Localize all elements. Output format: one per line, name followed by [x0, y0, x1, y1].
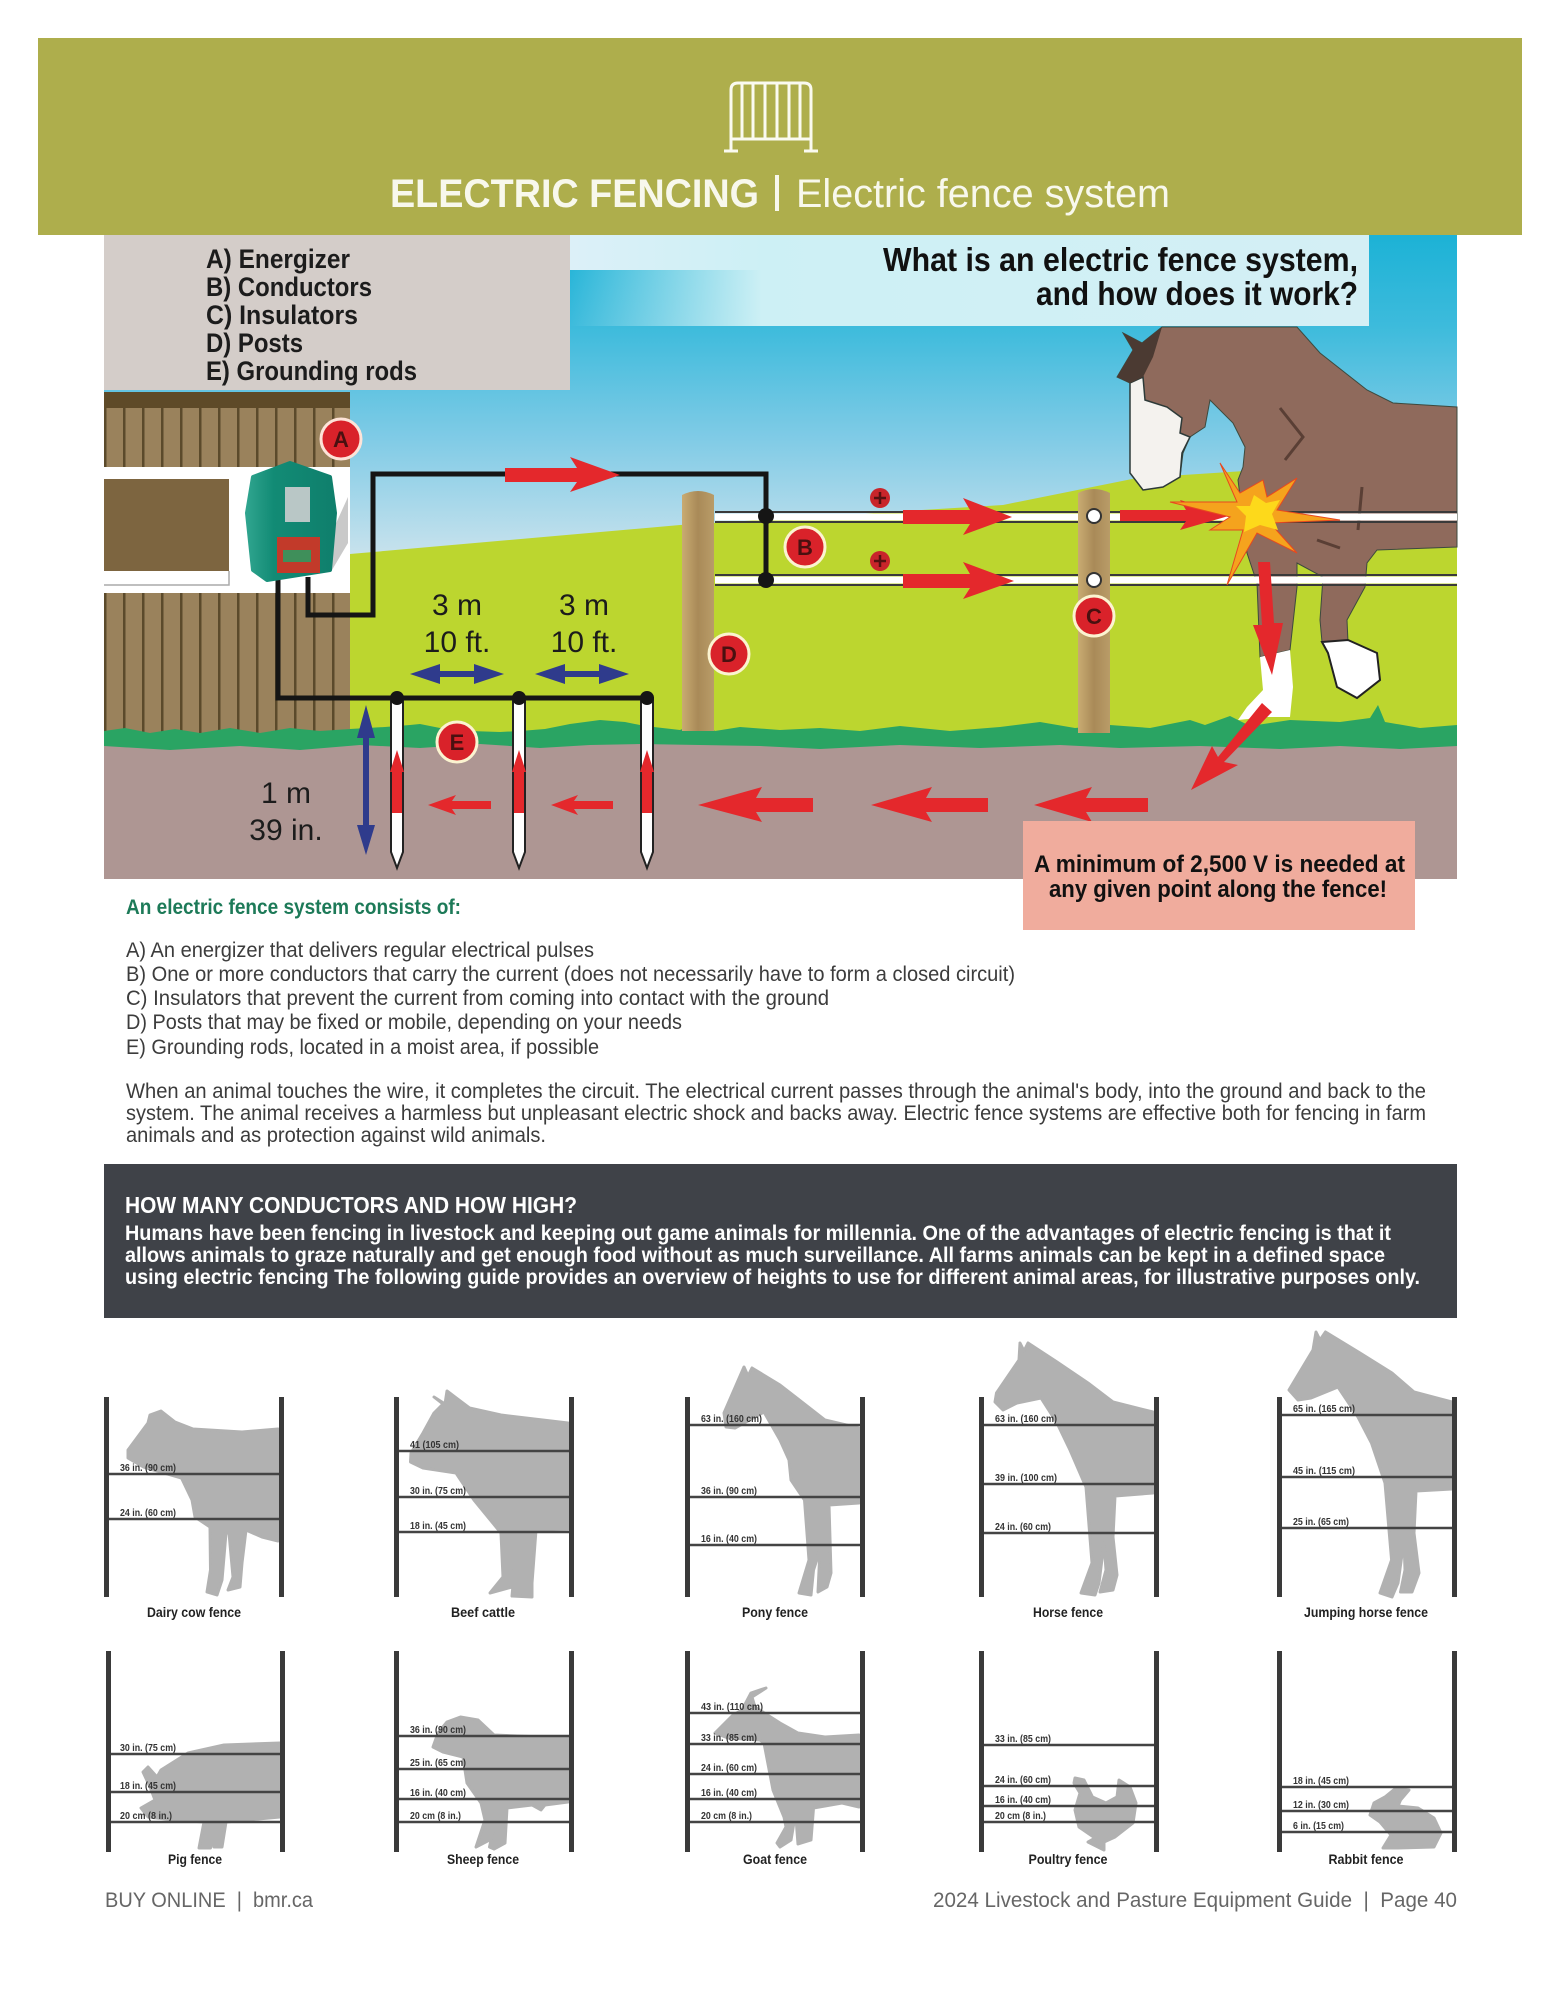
- fence guide: goat: 16 in. (40 cm): [701, 1787, 757, 1799]
- component list: A) An energizer that delivers regular electrical pulses: [126, 939, 594, 962]
- fence guide: rabbit: 12 in. (30 cm): [1293, 1799, 1349, 1811]
- fence guide: jumping horse: [1277, 1332, 1457, 1620]
- marker B: [785, 527, 825, 567]
- horse forelock: [1117, 327, 1162, 383]
- distance labels: 10 ft.: [551, 626, 617, 659]
- post C: [1078, 489, 1110, 733]
- horse: [1117, 327, 1457, 720]
- fence guide: pony: [685, 1367, 865, 1620]
- panel: question background: [570, 235, 1369, 326]
- callout: minimum voltage: [1023, 821, 1415, 930]
- distance labels: 3 m: [432, 589, 482, 622]
- explanation paragraph: [126, 1080, 1426, 1147]
- component list: B) One or more conductors that carry the current (does not necessarily have to form a closed circuit): [126, 963, 1015, 986]
- body text: [125, 1222, 1420, 1289]
- fence guide: goat: 33 in. (85 cm): [701, 1732, 757, 1744]
- fence guide: sheep: Sheep fence: [447, 1851, 519, 1867]
- distance labels: 3 m: [559, 589, 609, 622]
- question heading: [883, 241, 1358, 312]
- fence guide: sheep: [394, 1651, 574, 1867]
- fence guide: goat: 20 cm (8 in.): [701, 1810, 752, 1822]
- fence guide: dairy cow: [104, 1397, 284, 1620]
- distance labels: 10 ft.: [424, 626, 490, 659]
- footer right: 2024 Livestock and Pasture Equipment Guide | Page 40: [933, 1889, 1457, 1912]
- fence guide: goat: [685, 1651, 865, 1867]
- marker E: [437, 722, 477, 762]
- panel: how many conductors: [104, 1164, 1457, 1318]
- panel: parts legend: E) Grounding rods: [206, 356, 417, 386]
- question heading: What is an electric fence system,: [883, 241, 1358, 278]
- fence guide: beef cattle: 30 in. (75 cm): [410, 1485, 466, 1497]
- fence guide: pig: [106, 1651, 285, 1867]
- marker A: [321, 419, 361, 459]
- fence guide: rabbit: 18 in. (45 cm): [1293, 1775, 1349, 1787]
- fence guide: pony: 36 in. (90 cm): [701, 1485, 757, 1497]
- fence guide: poultry: [979, 1651, 1159, 1867]
- title: ELECTRIC FENCING: [390, 172, 759, 216]
- header band: [38, 38, 1522, 235]
- distance labels: 1 m: [261, 777, 311, 810]
- panel: parts legend: C) Insulators: [206, 300, 358, 330]
- fence guide: horse: [979, 1343, 1159, 1620]
- post D: [682, 491, 714, 731]
- horse blaze: [1130, 377, 1190, 490]
- explanation paragraph: When an animal touches the wire, it completes the circuit. The electrical current passes through the animal's body, into the ground and back to the: [126, 1080, 1426, 1103]
- panel: parts legend: [104, 235, 570, 390]
- fence guide: pig: Pig fence: [168, 1851, 222, 1867]
- subheading: An electric fence system consists of:: [126, 896, 461, 919]
- marker E: E: [450, 730, 464, 755]
- fence guide: poultry: 16 in. (40 cm): [995, 1794, 1051, 1806]
- fence guide: dairy cow: Dairy cow fence: [147, 1604, 241, 1620]
- callout: minimum voltage: any given point along the fence!: [1049, 876, 1387, 903]
- component list: D) Posts that may be fixed or mobile, depending on your needs: [126, 1011, 682, 1034]
- marker D: D: [721, 642, 737, 667]
- distance labels: [249, 589, 617, 847]
- fence guide: sheep: 20 cm (8 in.): [410, 1810, 461, 1822]
- grass strip: [104, 705, 1457, 750]
- icon: fence barricade: [724, 83, 818, 151]
- cloud: [570, 235, 970, 270]
- fence guide: beef cattle: 41 (105 cm): [410, 1439, 459, 1451]
- fence guide: poultry: Poultry fence: [1028, 1851, 1108, 1867]
- panel: parts legend: A) Energizer: [206, 244, 350, 274]
- callout: minimum voltage: A minimum of 2,500 V is needed at: [1034, 851, 1405, 878]
- spark core: [1236, 495, 1280, 532]
- fence guide: rabbit: Rabbit fence: [1328, 1851, 1404, 1867]
- component list: E) Grounding rods, located in a moist area, if possible: [126, 1036, 599, 1059]
- fence wires: [715, 512, 1457, 585]
- subtitle: Electric fence system: [796, 172, 1170, 216]
- fence guide: pig: 18 in. (45 cm): [120, 1780, 176, 1792]
- fence guide: goat: Goat fence: [743, 1851, 807, 1867]
- horse body: [1117, 327, 1457, 657]
- fence guide: sheep: 25 in. (65 cm): [410, 1757, 466, 1769]
- body text: allows animals to graze naturally and get enough food without as much surveillance. All farms animals can be kept in a defined space: [125, 1244, 1385, 1267]
- ground: [104, 738, 1457, 879]
- fence guide: poultry: 33 in. (85 cm): [995, 1733, 1051, 1745]
- horse front sock: [1238, 650, 1293, 720]
- title separator: [775, 175, 779, 211]
- component list: C) Insulators that prevent the current from coming into contact with the ground: [126, 987, 829, 1010]
- explanation paragraph: animals and as protection against wild animals.: [126, 1124, 546, 1147]
- barn: [104, 392, 350, 735]
- leg and ground arrows: [428, 562, 1283, 822]
- marker A: A: [333, 427, 349, 452]
- marker B: B: [797, 535, 813, 560]
- fence guide: poultry: 20 cm (8 in.): [995, 1810, 1046, 1822]
- footer left: BUY ONLINE | bmr.ca: [105, 1889, 313, 1912]
- insulators: [1087, 509, 1101, 587]
- component list: [126, 939, 1015, 1059]
- fence guide: jumping horse: Jumping horse fence: [1304, 1604, 1428, 1620]
- horse rear hoof: [1322, 640, 1380, 698]
- conductor wires: [278, 474, 766, 698]
- wire joints: [758, 508, 774, 588]
- pasture: [350, 470, 1457, 745]
- plus markers: [870, 488, 890, 571]
- diagram: electric fence scene: [104, 235, 1457, 930]
- heading: HOW MANY CONDUCTORS AND HOW HIGH?: [125, 1192, 577, 1218]
- fence guide: goat: 24 in. (60 cm): [701, 1762, 757, 1774]
- horse muscle lines: [1280, 408, 1362, 548]
- fence guide: beef cattle: [394, 1391, 574, 1620]
- energizer: [247, 463, 335, 580]
- fence guide: dairy cow: 36 in. (90 cm): [120, 1462, 176, 1474]
- fence guide: sheep: 36 in. (90 cm): [410, 1724, 466, 1736]
- fence guide: pony: Pony fence: [742, 1604, 808, 1620]
- fence guide: sheep: 16 in. (40 cm): [410, 1787, 466, 1799]
- marker D: [709, 634, 749, 674]
- body text: Humans have been fencing in livestock and keeping out game animals for millennia. One of the advantages of electric fencing is that it: [125, 1222, 1391, 1245]
- fence guide: horse: 39 in. (100 cm): [995, 1472, 1057, 1484]
- fence guide: jumping horse: 25 in. (65 cm): [1293, 1516, 1349, 1528]
- fence guide: pony: 63 in. (160 cm): [701, 1413, 762, 1425]
- panel: parts legend: D) Posts: [206, 328, 303, 358]
- red current arrows: [505, 457, 1232, 599]
- fence guide: rabbit: 6 in. (15 cm): [1293, 1820, 1344, 1832]
- text block: system components: [126, 896, 1426, 1147]
- fence guide: pig: 30 in. (75 cm): [120, 1742, 176, 1754]
- fence guide: jumping horse: 45 in. (115 cm): [1293, 1465, 1355, 1477]
- fence guide: beef cattle: Beef cattle: [451, 1604, 515, 1620]
- fence guide: pony: 16 in. (40 cm): [701, 1533, 757, 1545]
- fence guide: horse: 63 in. (160 cm): [995, 1413, 1057, 1425]
- marker C: [1074, 596, 1114, 636]
- fence guide: dairy cow: 24 in. (60 cm): [120, 1507, 176, 1519]
- fence guide: horse: Horse fence: [1033, 1604, 1103, 1620]
- fence guide: goat: 43 in. (110 cm): [701, 1701, 763, 1713]
- spark: [1170, 463, 1340, 585]
- question heading: and how does it work?: [1036, 275, 1358, 312]
- grounding rods: [390, 691, 654, 868]
- fence guide: rabbit: [1277, 1651, 1457, 1867]
- body text: using electric fencing The following guide provides an overview of heights to use for different animal areas, for illustrative purposes only.: [125, 1266, 1420, 1289]
- fence guide: jumping horse: 65 in. (165 cm): [1293, 1403, 1355, 1415]
- fence guide: horse: 24 in. (60 cm): [995, 1521, 1051, 1533]
- marker C: C: [1086, 604, 1102, 629]
- distance labels: 39 in.: [249, 814, 323, 847]
- fence guide: beef cattle: 18 in. (45 cm): [410, 1520, 466, 1532]
- sky: [104, 235, 1457, 575]
- panel: parts legend: B) Conductors: [206, 272, 372, 302]
- fence guide: poultry: 24 in. (60 cm): [995, 1774, 1051, 1786]
- explanation paragraph: system. The animal receives a harmless but unpleasant electric shock and backs away. Electric fence systems are effective both for fencing in farm: [126, 1102, 1426, 1125]
- fence guide: pig: 20 cm (8 in.): [120, 1810, 172, 1822]
- blue dimension arrows: [357, 664, 629, 855]
